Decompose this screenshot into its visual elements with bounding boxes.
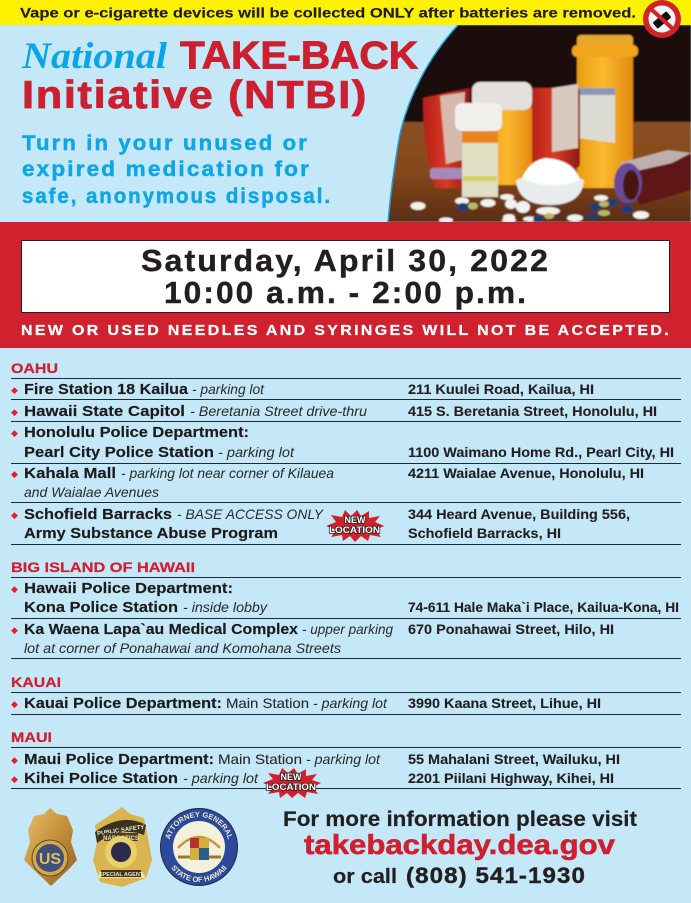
divider lines: [11, 378, 681, 788]
site: Fire Station 18 Kailua: - parking lot: [192, 381, 265, 397]
small front bottle: [461, 130, 498, 144]
site: Hawaii Police Department: Kona Police Station: [24, 600, 178, 616]
site: Honolulu Police Department: - parking lot: [218, 444, 295, 460]
icon: Attorney General seal: ATTORNEY GENERAL: [166, 812, 232, 840]
site: Hawaii State Capitol: [11, 403, 657, 420]
tagline: safe, anonymous disposal.: [22, 185, 332, 208]
photo: medicine bottles and pills: [380, 25, 691, 222]
site: Kahala Mall: - parking lot near corner of Kilauea: [121, 465, 334, 481]
badge: new location (Kihei): [263, 768, 321, 798]
site: Kihei Police Station: Kihei Police Station: [24, 771, 178, 787]
title: Initiative (NTBI): [22, 74, 368, 117]
site: Ka Waena Lapa`au Medical Complex: [11, 621, 614, 656]
site: Fire Station 18 Kailua: [11, 381, 594, 398]
lying bottle: [637, 154, 691, 205]
site: Kauai Police Department: - parking lot: [313, 695, 388, 711]
warning banner: Vape or e-cigarette devices will be collected ONLY after batteries are removed.: [20, 4, 636, 20]
second red bottle: [530, 88, 580, 168]
more information block: or call: [333, 866, 397, 888]
icon: DEA badge: US: [39, 851, 61, 868]
site: Kauai Police Department: [11, 695, 601, 712]
photo edge: [388, 25, 458, 222]
site: Schofield Barracks: 344 Heard Avenue, Building 556,: [408, 506, 630, 522]
site: Hawaii State Capitol: Hawaii State Capitol: [24, 404, 185, 420]
icon: Public Safety Narcotics badge: PUBLIC SAFETY: [97, 825, 145, 837]
site: Maui Police Department: Maui Police Department:: [24, 752, 214, 768]
site: Maui Police Department: [11, 751, 620, 768]
amber bottle with white cap: [497, 106, 533, 186]
tagline: [22, 132, 332, 208]
site: Schofield Barracks: Army Substance Abuse Program: [24, 526, 278, 542]
badge: new location (Schofield): LOCATION: [329, 525, 380, 535]
badge: new location (Kihei): LOCATION: [266, 782, 316, 792]
date box: 10:00 a.m. - 2:00 p.m.: [164, 275, 528, 310]
section: Big Island of Hawaii: [11, 559, 679, 656]
icon: Attorney General seal: STATE OF HAWAII: [172, 865, 227, 882]
section: Oahu: [11, 360, 674, 542]
left red bottle: [423, 88, 470, 188]
site: Hawaii Police Department: [11, 581, 679, 616]
tall amber bottle: [577, 50, 633, 188]
site: Schofield Barracks: [11, 506, 630, 542]
site: Kauai Police Department: Main Station: [226, 695, 309, 711]
site: Kahala Mall: and Waialae Avenues: [24, 484, 159, 500]
site: Kauai Police Department: Kauai Police Department:: [24, 696, 222, 712]
tagline: expired medication for: [22, 158, 311, 181]
icon: Public Safety Narcotics badge: [93, 807, 152, 887]
scattered pills: [410, 194, 649, 222]
site: Ka Waena Lapa`au Medical Complex: - upper parking: [302, 621, 393, 637]
more information block: (808) 541-1930: [406, 863, 586, 888]
site: Kihei Police Station: - parking lot: [183, 770, 259, 786]
icon: Attorney General seal: [160, 808, 238, 886]
site: Honolulu Police Department: ◆: [11, 428, 18, 438]
more information block: [283, 807, 637, 888]
site: Maui Police Department: 55 Mahalani Street, Wailuku, HI: [408, 751, 620, 767]
site: Ka Waena Lapa`au Medical Complex: ◆: [11, 625, 18, 635]
warning banner: [0, 0, 691, 25]
site: Schofield Barracks: - BASE ACCESS ONLY: [177, 506, 325, 522]
more information block: For more information please visit: [283, 807, 637, 831]
site: Fire Station 18 Kailua: 211 Kuulei Road, Kailua, HI: [408, 381, 594, 397]
badge: new location (Schofield): [326, 510, 384, 542]
section: Maui: [11, 729, 620, 798]
site: Honolulu Police Department: 1100 Waimano Home Rd., Pearl City, HI: [408, 444, 674, 460]
icon: Public Safety Narcotics badge: NARCOTICS: [103, 836, 139, 842]
site: Kihei Police Station: ◆: [11, 774, 18, 784]
site: Schofield Barracks: ◆: [11, 510, 18, 520]
heading: Maui: MAUI: [11, 729, 52, 745]
site: Fire Station 18 Kailua: Fire Station 18 Kailua: [24, 382, 189, 398]
badge: new location (Schofield): NEW: [344, 515, 366, 525]
site: Kihei Police Station: 2201 Piilani Highway, Kihei, HI: [408, 770, 614, 786]
red date band: [0, 222, 691, 348]
date box: Saturday, April 30, 2022: [141, 243, 550, 278]
site: Kauai Police Department: ◆: [11, 699, 18, 709]
site: Hawaii State Capitol: 415 S. Beretania Street, Honolulu, HI: [408, 403, 657, 419]
site: Schofield Barracks: Schofield Barracks: [24, 507, 172, 523]
site: Hawaii State Capitol: ◆: [11, 407, 18, 417]
title: National: [21, 36, 168, 77]
site: Hawaii Police Department: - inside lobby: [183, 599, 268, 615]
site: Hawaii Police Department: 74-611 Hale Maka`i Place, Kailua-Kona, HI: [408, 599, 679, 615]
site: Maui Police Department: Main Station: [218, 751, 302, 767]
section: Kauai: [11, 674, 601, 712]
site: Kihei Police Station: [11, 770, 614, 787]
site: Maui Police Department: - parking lot: [306, 751, 381, 767]
site: Kahala Mall: [11, 465, 644, 500]
site: Maui Police Department: ◆: [11, 755, 18, 765]
icon: DEA badge: [24, 808, 77, 886]
site: Kahala Mall: 4211 Waialae Avenue, Honolulu, HI: [408, 465, 644, 481]
icon: no vaping: [643, 0, 681, 38]
title: [21, 34, 418, 117]
site: Ka Waena Lapa`au Medical Complex: Ka Waena Lapa`au Medical Complex: [24, 622, 298, 638]
heading: Kauai: KAUAI: [11, 674, 61, 690]
date box: [22, 240, 670, 312]
site: Kahala Mall: Kahala Mall: [24, 466, 116, 482]
site: Hawaii State Capitol: - Beretania Street drive-thru: [190, 403, 367, 419]
site: Honolulu Police Department: Honolulu Police Department:: [24, 425, 249, 441]
needles notice: NEW OR USED NEEDLES AND SYRINGES WILL NOT BE ACCEPTED.: [21, 322, 671, 339]
more information block: takebackday.dea.gov: [304, 829, 615, 860]
site: Hawaii Police Department: Hawaii Police Department:: [24, 581, 233, 597]
site: Honolulu Police Department: [11, 425, 674, 461]
tagline: Turn in your unused or: [22, 132, 309, 155]
icon: Public Safety Narcotics badge: SPECIAL AGENT: [99, 872, 144, 878]
heading: Big Island: BIG ISLAND OF HAWAII: [11, 559, 195, 575]
site: Kauai Police Department: 3990 Kaana Street, Lihue, HI: [408, 695, 601, 711]
heading: Oahu: OAHU: [11, 360, 58, 376]
badge: new location (Kihei): NEW: [280, 772, 302, 782]
bowl of white pills: [516, 172, 584, 205]
site: Ka Waena Lapa`au Medical Complex: lot at corner of Ponahawai and Komohana Streets: [24, 640, 341, 656]
title: TAKE-BACK: [180, 34, 418, 78]
site: Ka Waena Lapa`au Medical Complex: 670 Ponahawai Street, Hilo, HI: [408, 621, 614, 637]
site: Fire Station 18 Kailua: ◆: [11, 385, 18, 395]
site: Hawaii Police Department: ◆: [11, 584, 18, 594]
site: Honolulu Police Department: Pearl City Police Station: [24, 445, 214, 461]
site: Schofield Barracks: Schofield Barracks, HI: [408, 525, 561, 541]
site: Kahala Mall: ◆: [11, 469, 18, 479]
